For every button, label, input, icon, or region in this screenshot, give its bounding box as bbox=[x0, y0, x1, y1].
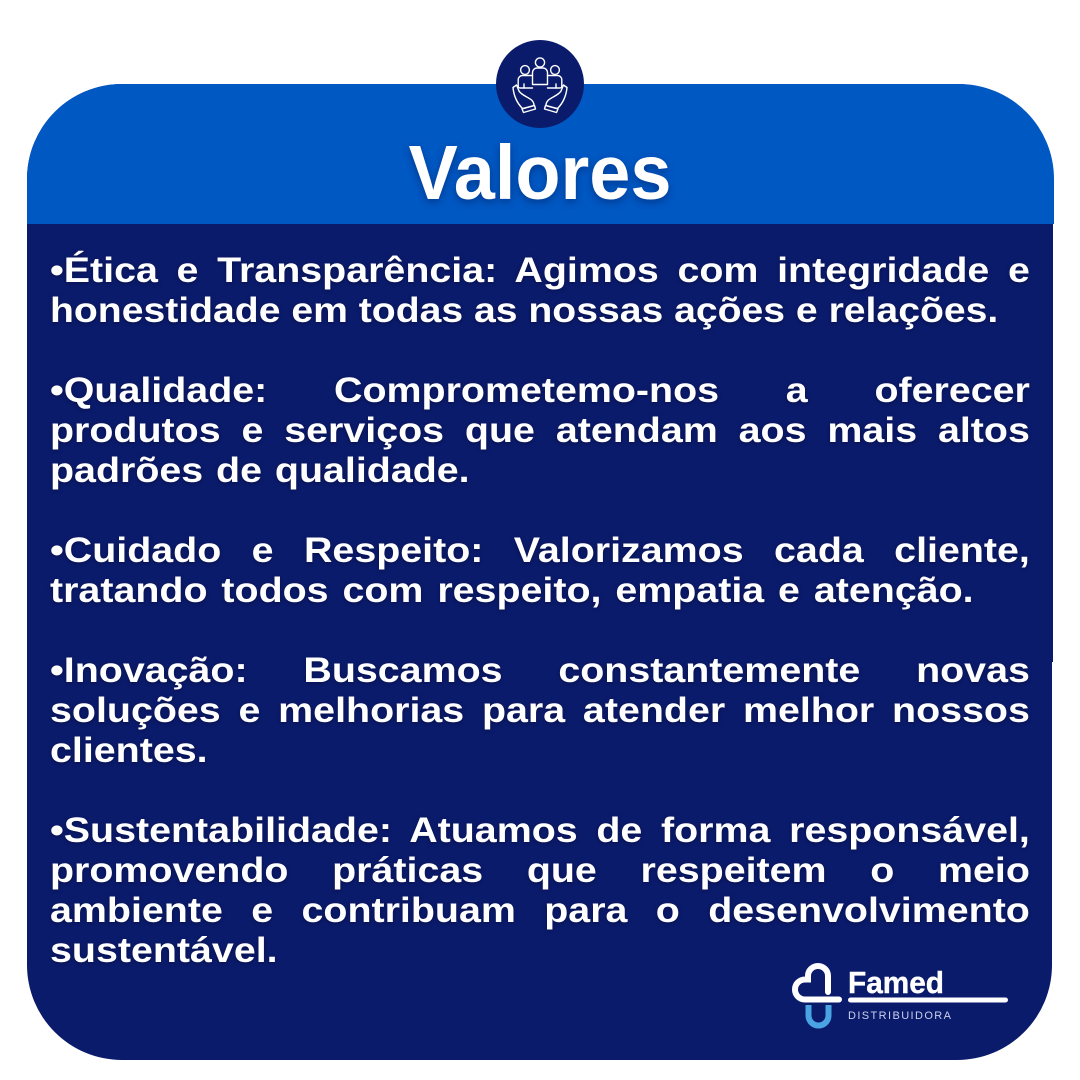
logo: Famed Distribuidora bbox=[792, 963, 1008, 1028]
value: Qualidade: padrões de qualidade. bbox=[50, 451, 470, 490]
icon: people held in hands bbox=[496, 40, 584, 128]
logo subtitle: DISTRIBUIDORA bbox=[848, 1010, 952, 1022]
text block: values list bbox=[50, 250, 1030, 970]
value: Sustentabilidade: •Sustentabilidade: Atuamos de forma responsável, bbox=[50, 811, 1030, 850]
value: Sustentabilidade: promovendo práticas que respeitem o meio bbox=[50, 851, 1030, 890]
value: Sustentabilidade: ambiente e contribuam para o desenvolvimento bbox=[50, 891, 1030, 930]
value: Qualidade bbox=[50, 371, 1030, 492]
value: Cuidado e Respeito: •Cuidado e Respeito: Valorizamos cada cliente, bbox=[50, 531, 1030, 570]
panel: blue header bbox=[27, 84, 1054, 224]
value: Sustentabilidade bbox=[50, 811, 1030, 970]
logo wordmark: Famed bbox=[848, 965, 944, 1000]
icon: logo heart cross bbox=[795, 966, 839, 1026]
value: Sustentabilidade: sustentável. bbox=[50, 931, 278, 970]
value: Ética e Transparência bbox=[50, 250, 1030, 332]
value: Cuidado e Respeito bbox=[50, 531, 1030, 612]
logo underline bbox=[848, 998, 1008, 1002]
value: Ética e Transparência: honestidade em todas as nossas ações e relações. bbox=[50, 291, 998, 330]
value: Inovação: clientes. bbox=[50, 731, 208, 770]
title: Valores bbox=[408, 130, 672, 216]
value: Cuidado e Respeito: tratando todos com respeito, empatia e atenção. bbox=[50, 571, 974, 610]
value: Inovação: soluções e melhorias para atender melhor nossos bbox=[50, 691, 1030, 730]
value: Inovação: •Inovação: Buscamos constantemente novas bbox=[50, 651, 1030, 690]
value: Ética e Transparência: •Ética e Transparência: Agimos com integridade e bbox=[50, 251, 1030, 290]
value: Inovação bbox=[50, 651, 1030, 770]
value: Qualidade: produtos e serviços que atendam aos mais altos bbox=[50, 411, 1030, 450]
value: Qualidade: •Qualidade: Comprometemo-nos a oferecer bbox=[50, 371, 1030, 410]
